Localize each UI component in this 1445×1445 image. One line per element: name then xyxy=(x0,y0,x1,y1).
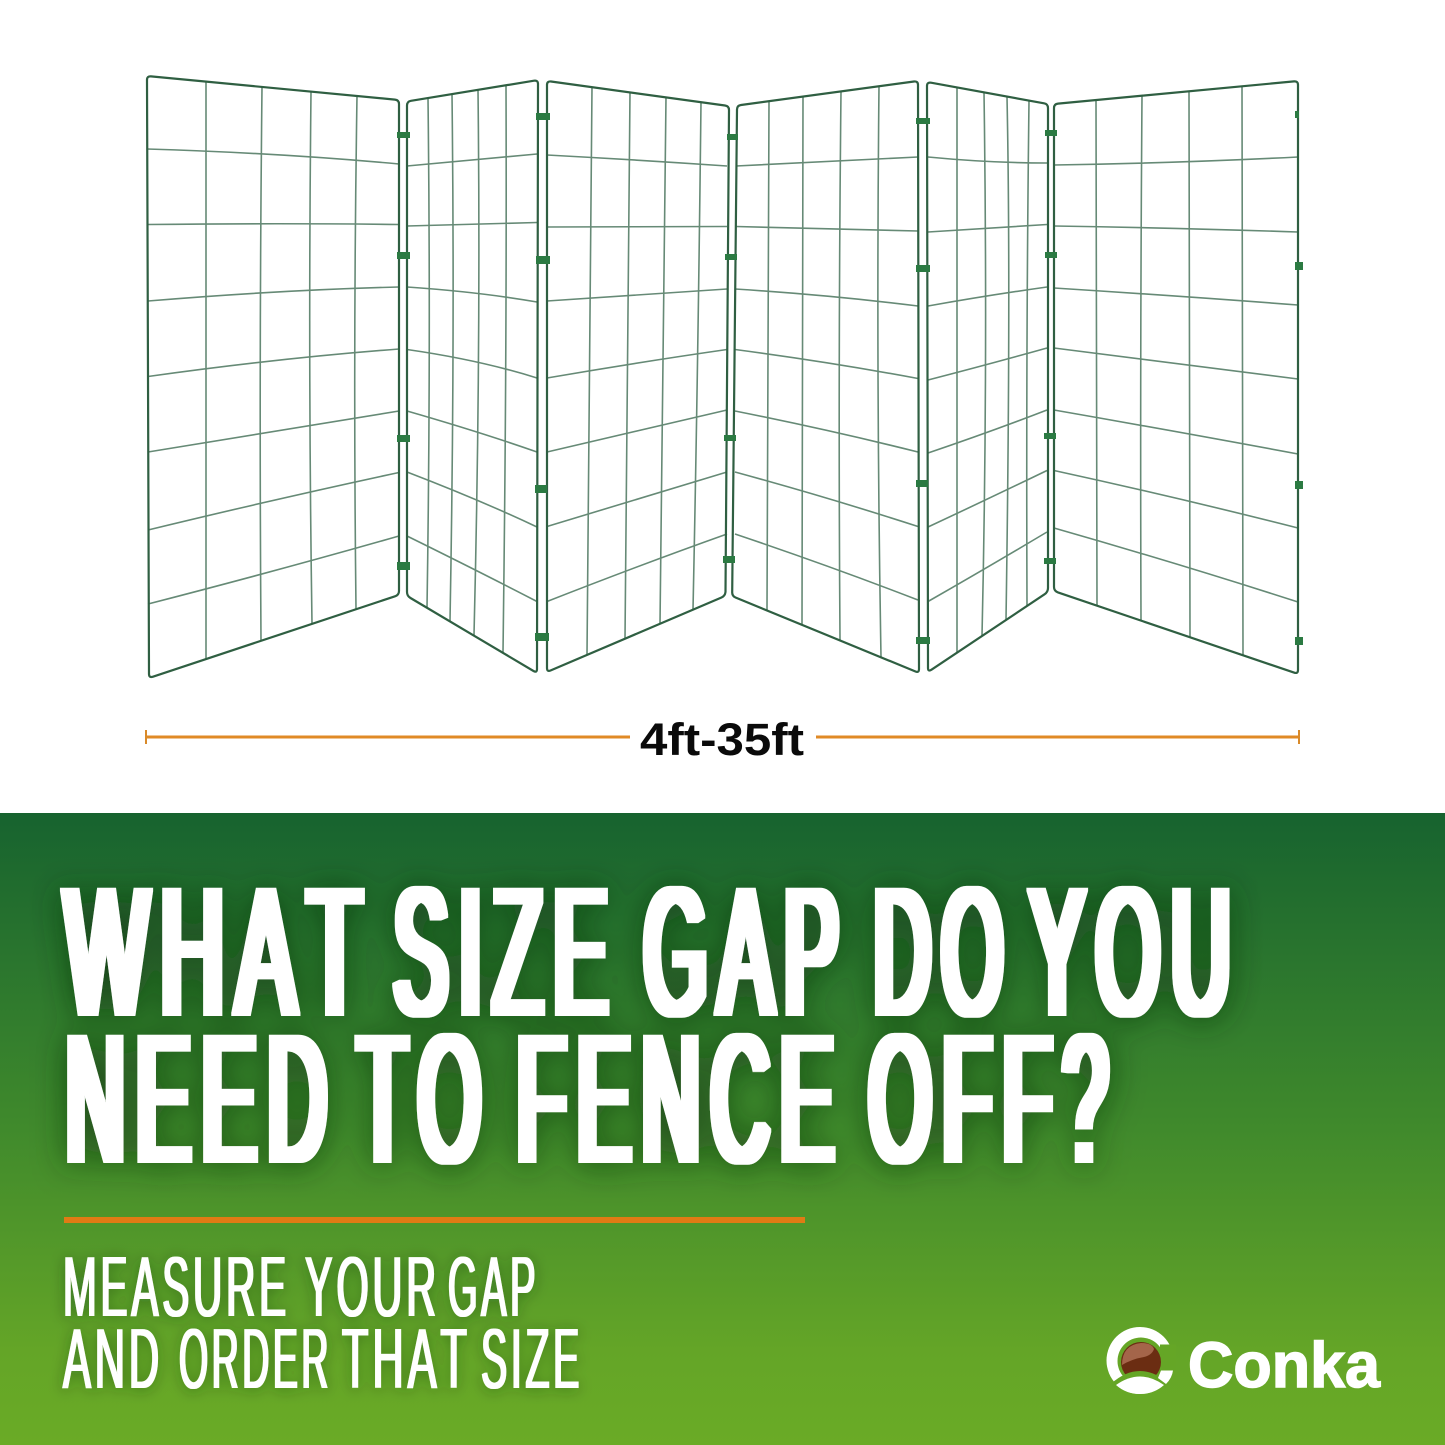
subheading: YOUR xyxy=(305,1240,440,1335)
subheading: AND xyxy=(63,1312,163,1407)
logo wordmark: Conka xyxy=(1188,1329,1380,1401)
text: SIZE xyxy=(481,1312,583,1407)
panel: fence section 2 xyxy=(407,81,538,672)
fence illustration xyxy=(147,76,1303,677)
panel: fence section 3 xyxy=(547,81,729,671)
heading: WHAT xyxy=(65,850,374,1054)
heading: NEED xyxy=(66,996,338,1200)
divider: orange rule xyxy=(64,1217,805,1223)
subheading: THAT xyxy=(342,1312,471,1407)
subheading: GAP xyxy=(448,1240,539,1335)
panel: fence section 6 xyxy=(1054,81,1298,673)
subheading: ORDER xyxy=(179,1312,332,1407)
panel: fence section 4 xyxy=(732,81,919,672)
heading xyxy=(65,850,1242,1200)
background: white upper area xyxy=(0,0,1445,813)
logo: Conka xyxy=(1106,1327,1380,1401)
dimension line: overall width xyxy=(146,714,1299,765)
icon: logo mark xyxy=(1106,1327,1176,1394)
heading: FENCE xyxy=(517,996,845,1200)
heading: GAP xyxy=(644,850,850,1054)
heading: SIZE xyxy=(394,850,619,1054)
connector clips xyxy=(397,111,1303,645)
subheading: MEASURE xyxy=(63,1240,290,1335)
panel: fence section 1 xyxy=(147,76,399,677)
dimension label: 4ft-35ft xyxy=(640,714,804,765)
panel: green gradient background xyxy=(0,813,1445,1445)
heading: DO xyxy=(874,850,1014,1054)
heading: TO xyxy=(358,996,492,1200)
subheading xyxy=(63,1240,583,1407)
panel: fence section 5 xyxy=(927,83,1048,671)
heading: OFF? xyxy=(869,996,1119,1200)
